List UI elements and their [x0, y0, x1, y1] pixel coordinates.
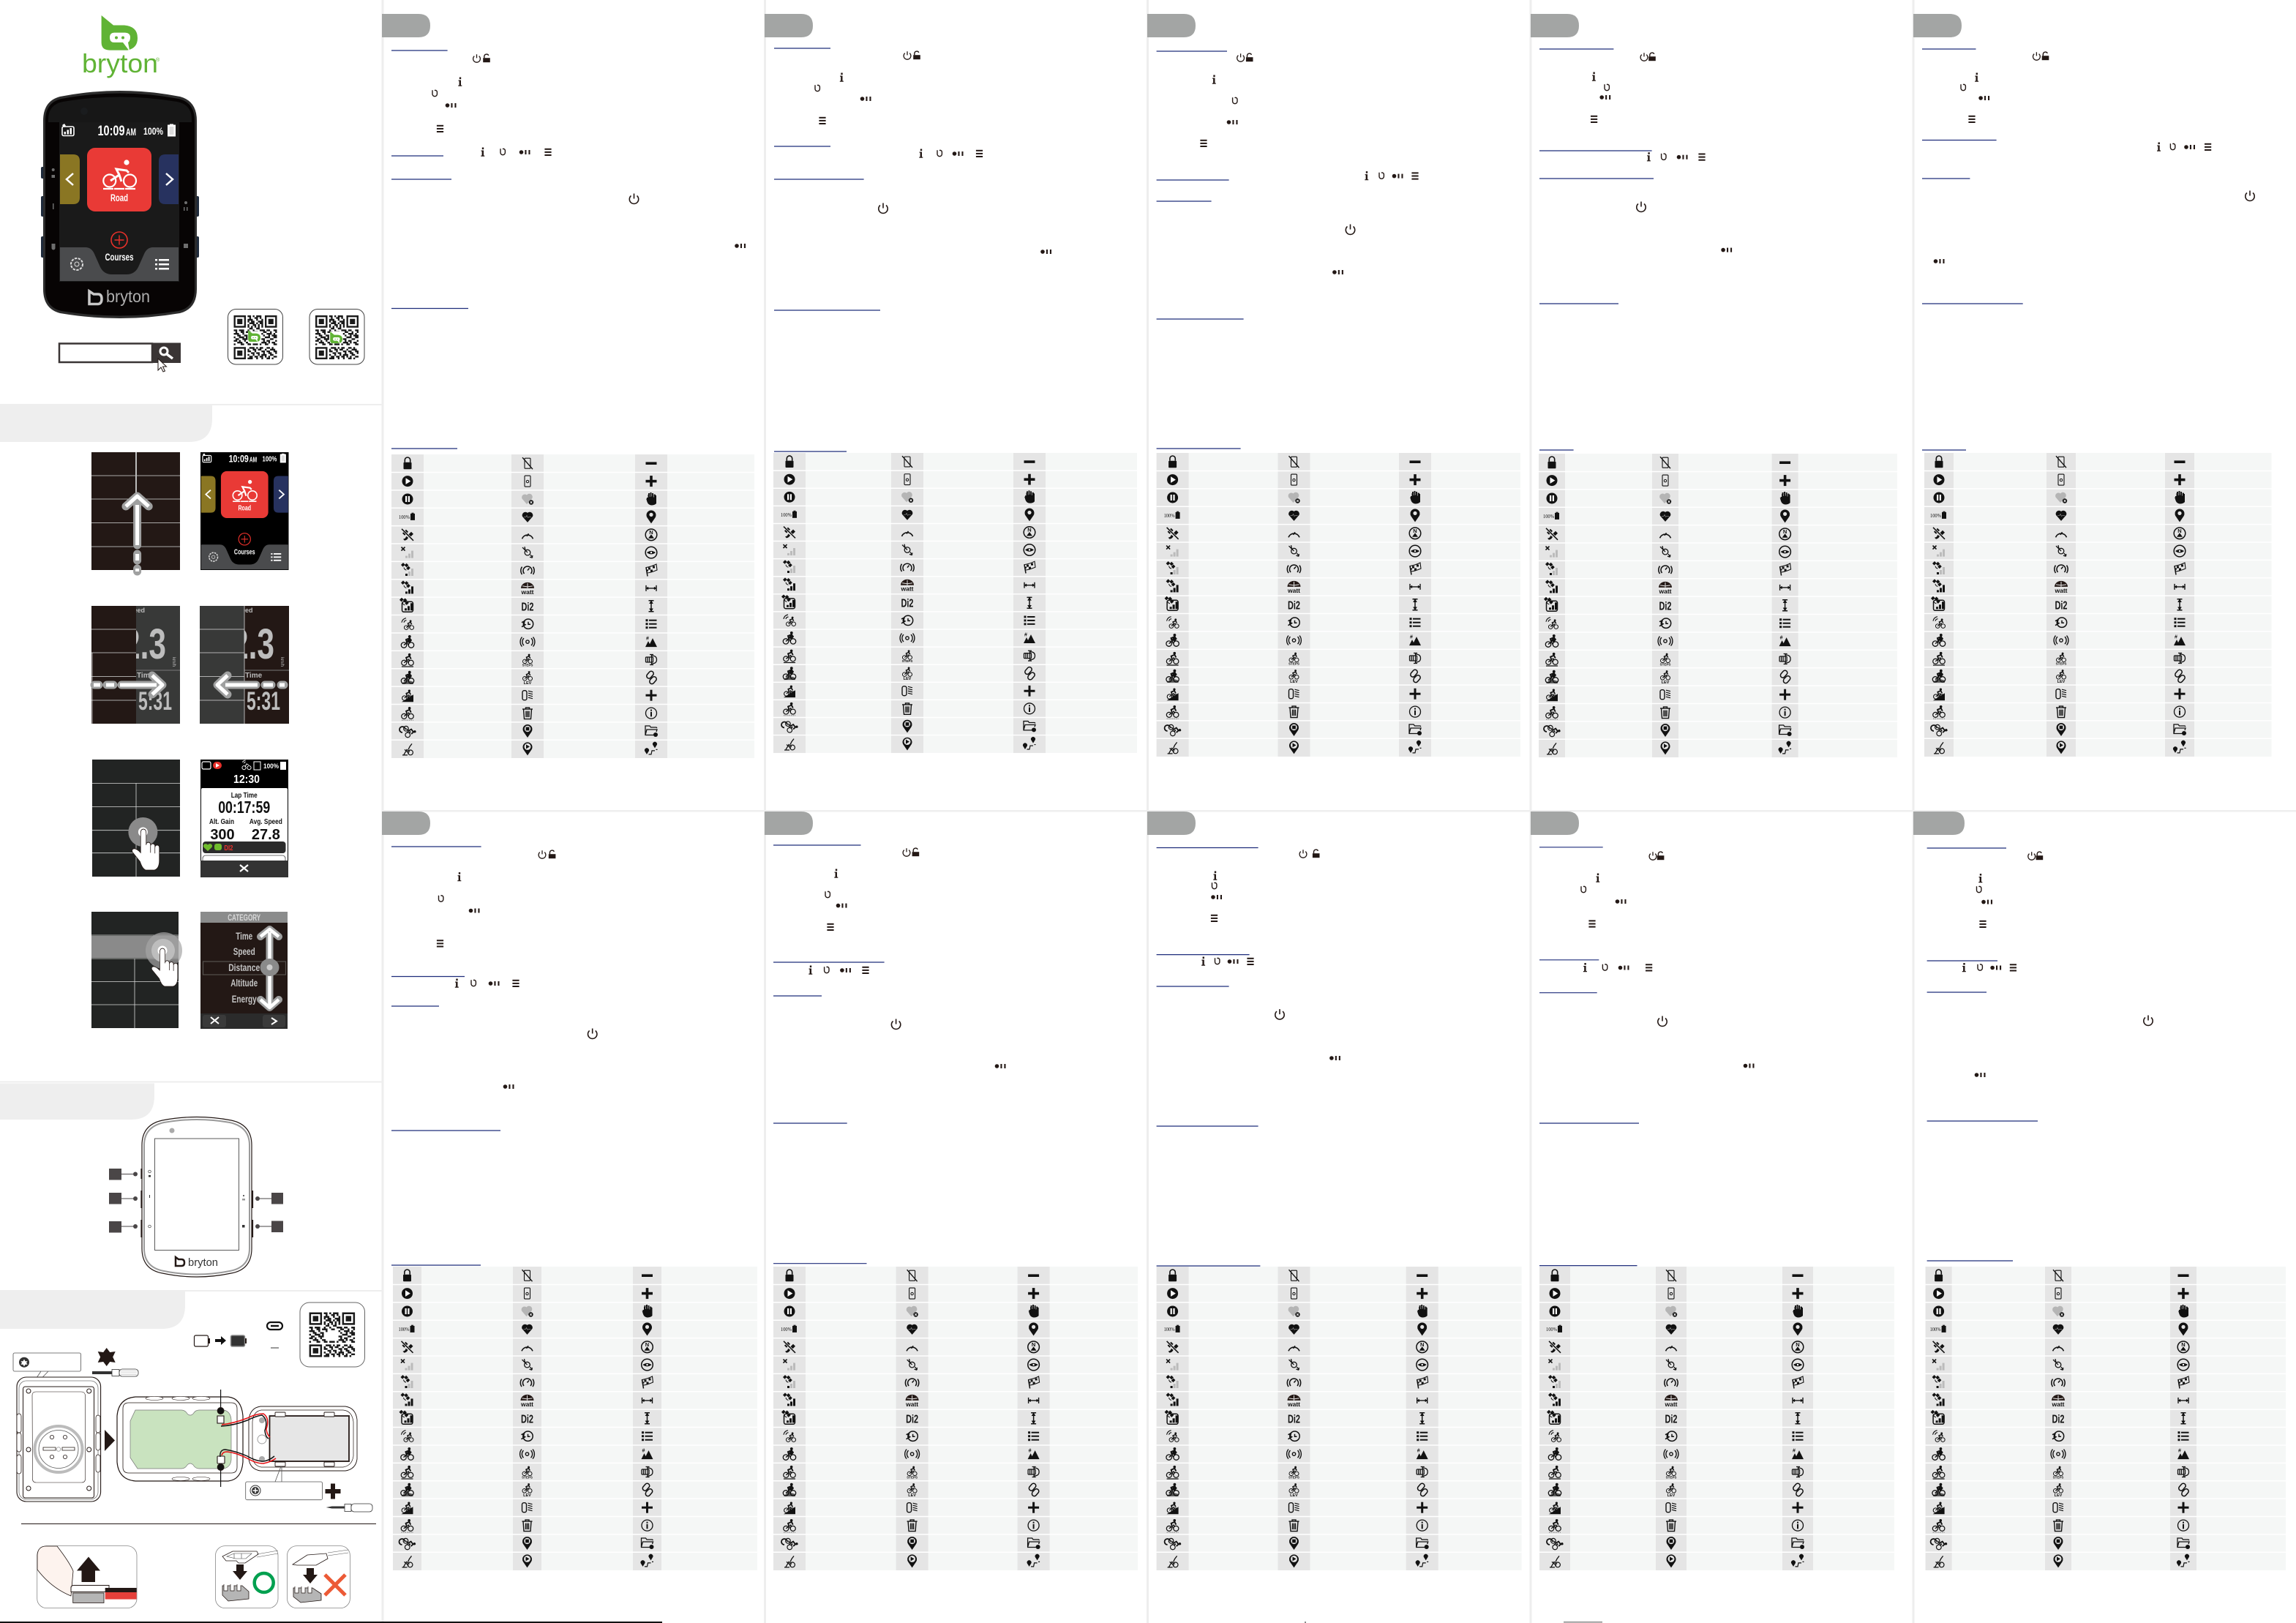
panel: gesture demos	[91, 452, 289, 1029]
panel: cover	[41, 15, 364, 372]
section header: battery	[0, 1292, 185, 1329]
screen: home	[200, 452, 288, 570]
screen: lap data: DI2	[224, 844, 233, 852]
gesture: swipe left: km/h	[280, 657, 284, 667]
section rules	[1922, 49, 2023, 450]
gesture: tap	[92, 760, 180, 877]
inline button icons	[432, 54, 746, 248]
qr code 1	[228, 309, 282, 364]
screen: category list: Distance	[228, 962, 260, 973]
section rules	[1927, 848, 2038, 1261]
inline button icons	[437, 850, 597, 1089]
inline button icons	[1962, 852, 2153, 1077]
icon table	[1539, 454, 1897, 757]
gesture: swipe up	[91, 452, 180, 571]
section header: gestures	[0, 405, 212, 442]
logo: bryton: ®	[156, 57, 160, 63]
screen: category list: CATEGORY	[228, 912, 260, 923]
gesture: swipe right: 2.3	[123, 621, 166, 668]
gesture: swipe left: 5:31	[247, 687, 280, 716]
logo: bryton	[82, 15, 160, 78]
gesture: long press	[91, 912, 182, 1028]
icon table	[393, 1267, 757, 1570]
panel: page 4 bottom	[1531, 812, 1894, 1570]
tab	[1147, 14, 1196, 37]
section rules	[1539, 847, 1639, 1266]
icon table	[391, 454, 754, 758]
screen: lap data: 300	[210, 827, 235, 843]
tab	[1147, 812, 1196, 835]
inline button icons	[1581, 852, 1755, 1068]
circuit board	[117, 1390, 243, 1487]
step: correct connector	[215, 1546, 278, 1608]
screen: lap data: Alt. Gain	[209, 817, 234, 826]
inline button icons	[1200, 53, 1419, 274]
inline button icons	[1934, 52, 2254, 263]
arrow: open device	[105, 1430, 115, 1451]
section rules	[774, 48, 880, 451]
tab	[1531, 14, 1579, 37]
screen: lap data: Lap Time	[231, 791, 258, 800]
tab	[1531, 812, 1579, 835]
callout: phillips screws	[246, 1466, 322, 1500]
gesture: swipe right: 5:31	[138, 687, 172, 716]
tab	[382, 14, 430, 37]
panel: page 3 bottom	[1147, 812, 1522, 1570]
icon table	[773, 1267, 1138, 1570]
icon table	[1539, 1267, 1894, 1570]
section rules	[1157, 847, 1260, 1266]
icon table	[1157, 453, 1520, 757]
panel: page 1 top	[382, 14, 754, 758]
device back	[17, 1377, 101, 1502]
screen: lap data: 00:17:59	[218, 798, 270, 817]
gesture: swipe right: Time	[137, 672, 154, 680]
diagram: device buttons	[109, 1117, 283, 1277]
gesture: swipe left	[200, 606, 289, 724]
panel: page 3 top	[1147, 14, 1520, 757]
charging indicator	[195, 1335, 247, 1346]
wires	[220, 1414, 276, 1463]
inline button icons	[1591, 53, 1732, 252]
callout: torx screws	[13, 1353, 80, 1390]
section rules	[1539, 49, 1654, 450]
gesture: swipe right	[91, 606, 180, 724]
device photo	[41, 91, 199, 318]
inline button icons	[1201, 850, 1340, 1060]
icon: torx bit and screwdriver	[92, 1348, 138, 1376]
icon: phillips bit and screwdriver	[325, 1484, 372, 1512]
qr code	[300, 1302, 364, 1367]
icon table	[773, 453, 1137, 753]
usb-c port	[267, 1322, 282, 1348]
gesture: swipe right: km/h	[171, 657, 176, 667]
tab	[765, 812, 813, 835]
screen: category list: Energy	[232, 993, 257, 1005]
panel: page 4 top	[1531, 14, 1897, 757]
section rules	[391, 50, 468, 449]
section rules	[391, 847, 500, 1265]
callout labels	[109, 1169, 283, 1232]
screen: lap data: 27.8	[252, 827, 280, 843]
qr code 2	[309, 309, 364, 364]
screen: category list	[200, 912, 288, 1029]
gesture: swipe left: 2.3	[231, 621, 274, 668]
step: lift connector	[37, 1546, 137, 1608]
panel: page 2 top	[765, 14, 1137, 753]
battery housing	[249, 1406, 357, 1471]
screen: category list: Speed	[233, 945, 255, 957]
inline button icons	[809, 848, 1005, 1068]
screen: category list: Time	[236, 930, 252, 942]
gesture: swipe left: Speed	[233, 607, 253, 614]
icon table	[1926, 1267, 2286, 1570]
panel: battery replacement	[13, 1302, 376, 1608]
diagram: device buttons: bryton	[188, 1256, 218, 1269]
logo: bryton: bryton	[82, 48, 158, 78]
panel: page 1 bottom	[382, 812, 757, 1570]
inline button icons	[815, 51, 1051, 254]
screen: lap data: 100%	[263, 762, 279, 770]
panel: page 5 bottom	[1913, 812, 2286, 1570]
tab	[1913, 812, 1965, 835]
search box	[59, 342, 181, 372]
screen: lap data	[200, 760, 288, 877]
screen: lap data: 12:30	[233, 773, 260, 786]
section rules	[773, 845, 885, 1264]
tab	[765, 14, 813, 37]
step: incorrect connector	[287, 1546, 350, 1608]
device photo: bryton	[106, 287, 150, 306]
panel: page 5 top	[1913, 14, 2271, 757]
tab	[1913, 14, 1962, 37]
screen: lap data: Avg. Speed	[250, 817, 282, 826]
icon table	[1924, 453, 2271, 757]
icon table	[1157, 1267, 1522, 1570]
section header: buttons	[0, 1083, 154, 1120]
gesture: swipe left: Time	[245, 672, 263, 680]
section rules	[1157, 51, 1244, 449]
panel: page 2 bottom	[765, 812, 1138, 1570]
screen: category list: Altitude	[230, 977, 258, 989]
tab	[382, 812, 430, 835]
gesture: swipe right: Speed	[125, 607, 145, 614]
